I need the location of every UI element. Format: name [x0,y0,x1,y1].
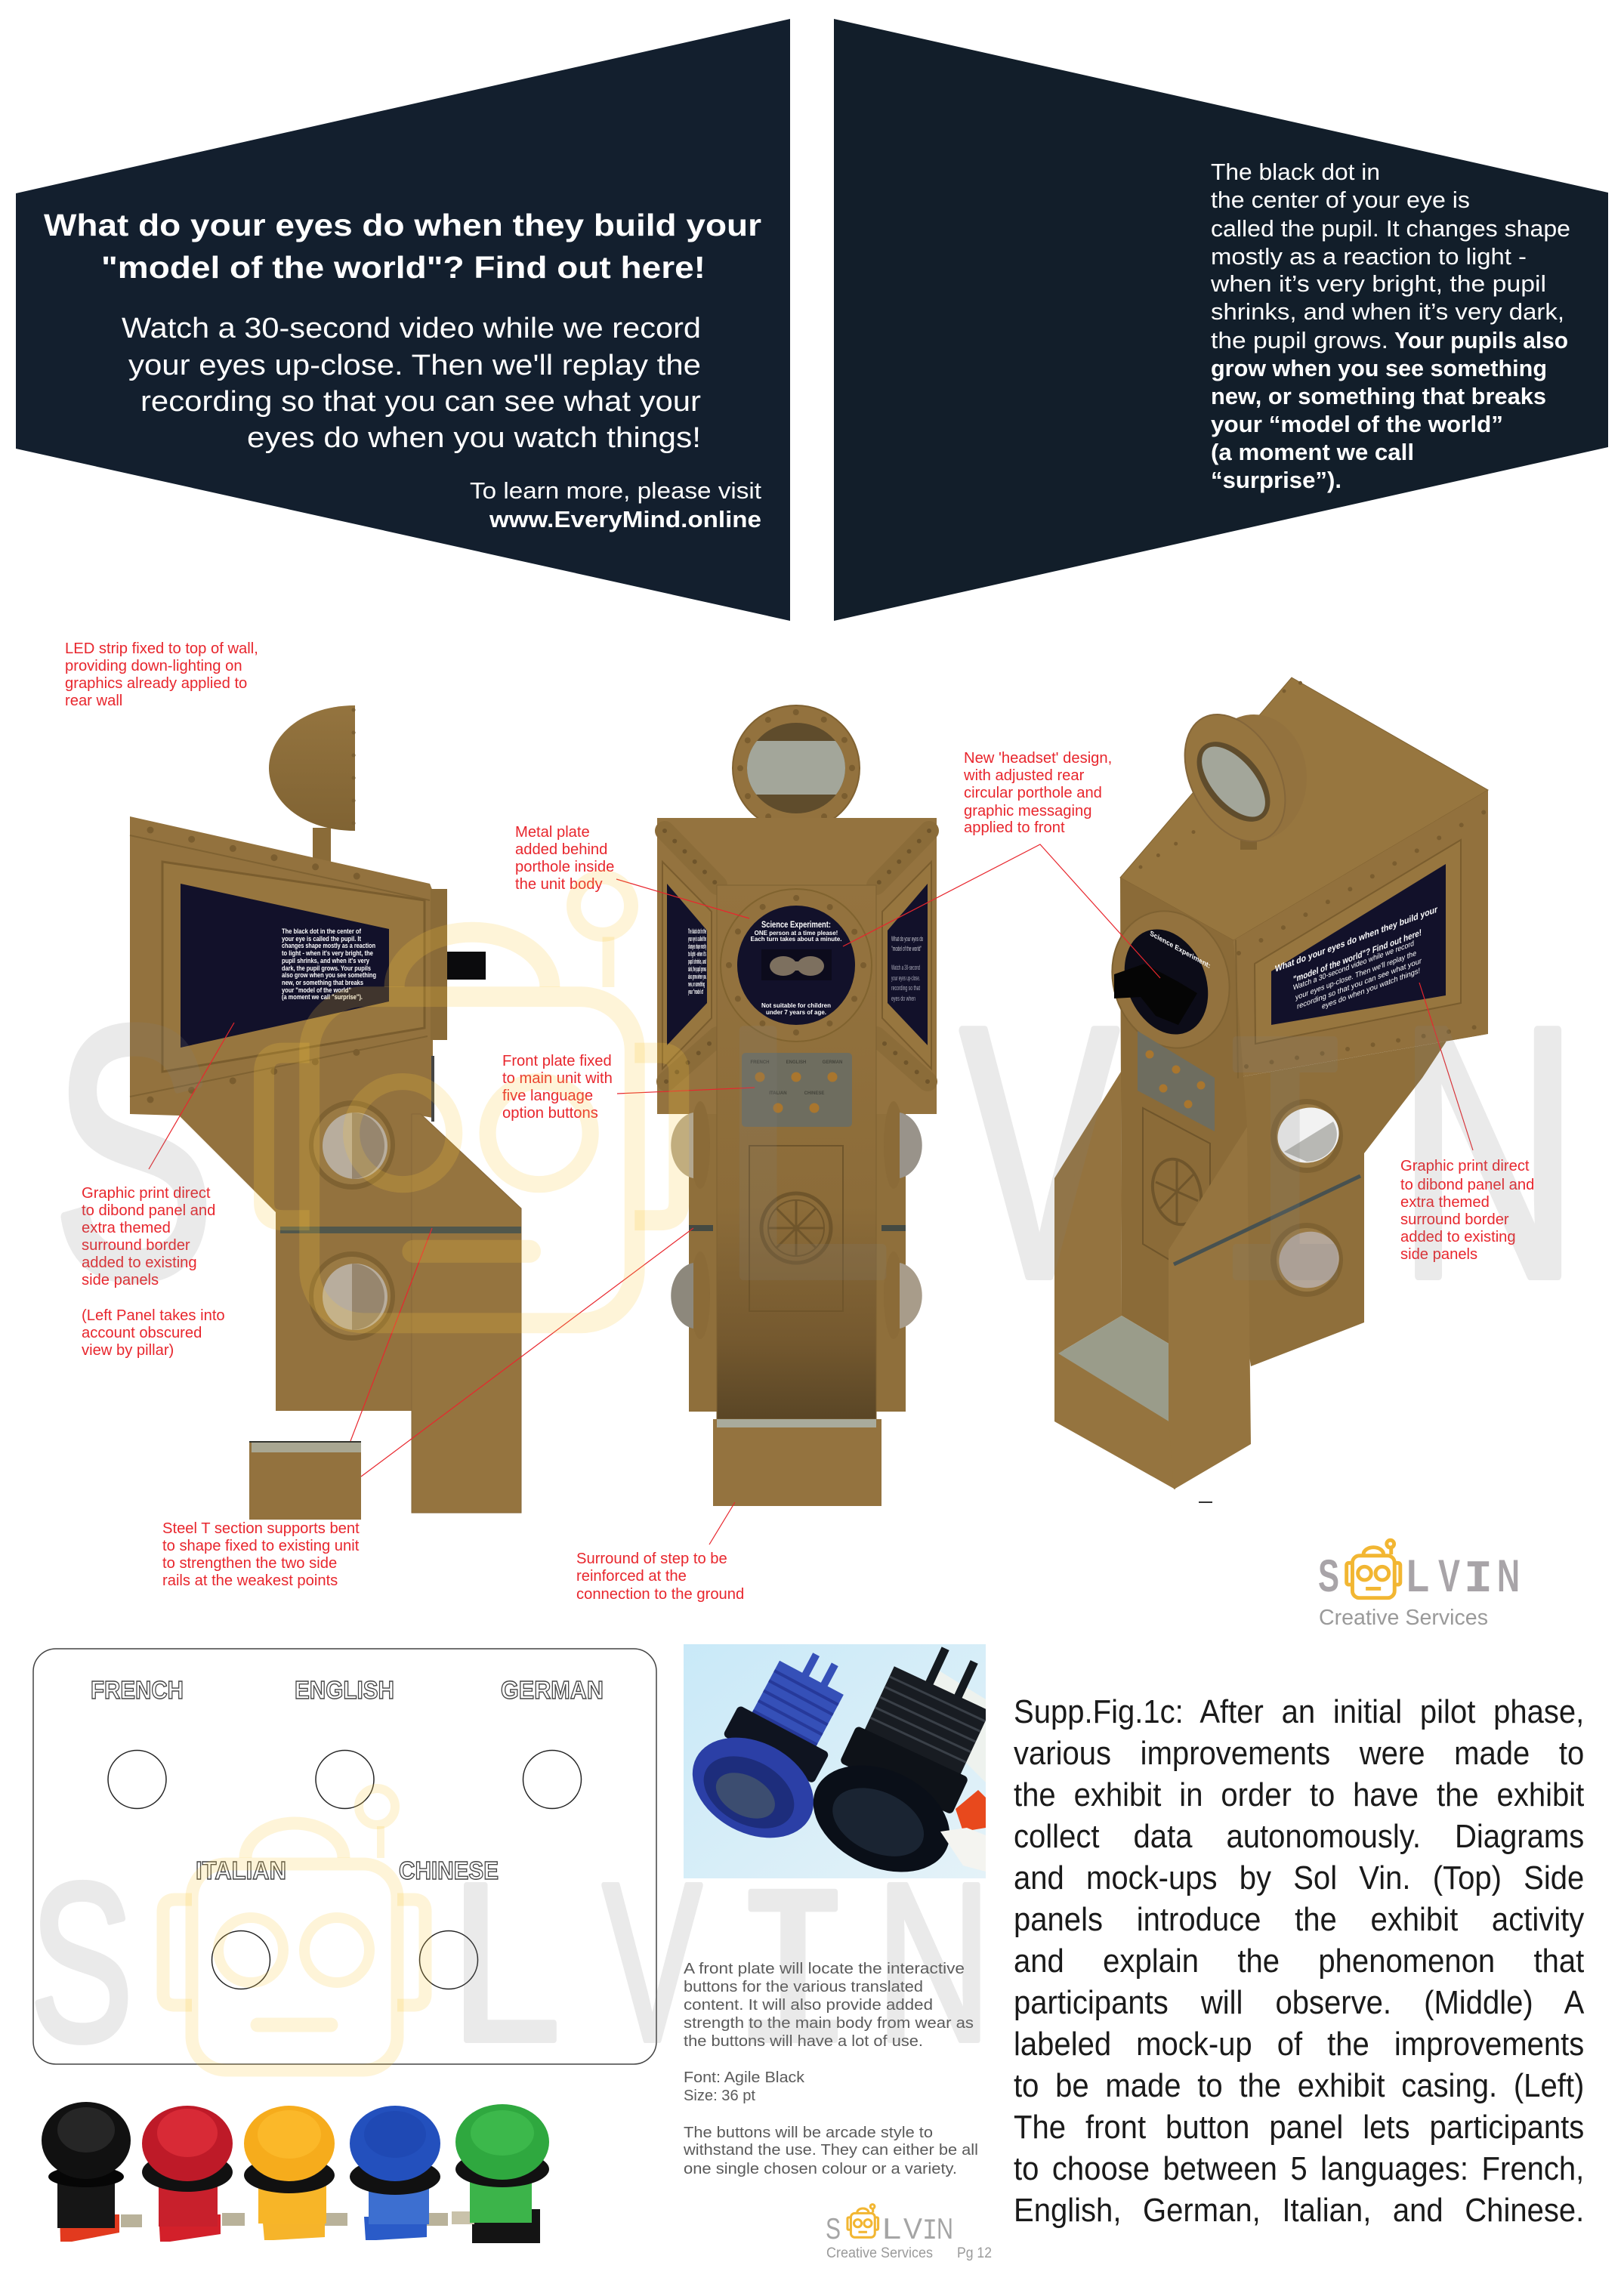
callout: LED strip: rear wall [65,693,122,709]
text block: figure caption: Supp.Fig.1c: After an initial pilot phase, [1014,1693,1584,1730]
mock-up: front view of exhibit: changes shape mostly [688,943,706,950]
watermark: upper Solvin logo: I [1212,979,1359,1383]
front button plate: GERMAN [823,1060,842,1065]
callout: LED strip: providing down-lighting on [65,658,242,674]
text block: pupil explanation: when it’s very bright, the pupil [1210,270,1546,297]
front button plate: ENGLISH [786,1060,806,1065]
callout: step surround [576,1551,744,1603]
logo: small Solvin footer: V [903,2213,922,2245]
graphic screen: pupil shrinks, and when it's very [282,957,370,965]
front step [713,1419,881,1506]
side panel face [1233,790,1488,1078]
text block: website link [470,477,761,532]
pillar [412,1114,521,1513]
watermark: lower Solvin logo [30,1788,991,2108]
right side screen: "model of the world" [891,945,922,952]
central porthole: Science Experiment: [761,919,831,930]
watermark: lower Solvin logo: I [730,1853,856,2108]
text block: front plate notes: strength to the main body from wear as [684,2015,974,2032]
callout: graphic print right [1400,1158,1534,1263]
text block: pupil explanation: your “model of the world” [1211,411,1503,437]
top face [1120,677,1488,940]
front button plate: FRENCH [751,1060,769,1065]
logo: Solvin Creative Services: Creative Services [1319,1606,1488,1630]
text block: figure caption: collect data autonomously. Diagrams [1014,1818,1584,1855]
text block: pupil explanation: shrinks, and when it’s very dark, [1211,298,1564,325]
front porthole: Science Experiment: [1150,929,1211,970]
alcove wall [1054,1072,1122,1359]
watermark: lower Solvin logo: V [603,1837,702,2088]
graphic screen [1271,864,1446,1025]
upper body [657,818,937,1114]
callout: step surround: reinforced at the [576,1568,687,1585]
headset dome [269,705,355,863]
text block: front plate notes: Size: 36 pt [684,2088,755,2104]
logo: small Solvin footer: N [937,2213,953,2245]
text block: figure caption: and explain the phenomenon that [1014,1943,1584,1980]
callout: graphic print left [82,1185,225,1359]
graphic screen: eyes do when you watch things! [1322,967,1420,1011]
switch block [925,1671,986,1782]
side rails [689,1225,906,1231]
callout: graphic print right: surround border [1400,1211,1509,1228]
callout: graphic print left: surround border [82,1237,190,1254]
graphic screen: your eyes up-close. Then we'll replay the [1295,949,1416,1002]
callout: front plate: five language [502,1088,593,1104]
callout: graphic print left: account obscured [82,1325,202,1341]
text block: pupil explanation: called the pupil. It changes shape [1211,215,1570,242]
text block: front plate notes: content. It will also provide added [684,1997,933,2014]
graphic screen: Watch a 30-second video while we record [1293,940,1414,992]
text block: front plate notes: Font: Agile Black [684,2069,805,2086]
heading: panel question: "model of the world"? Find out here! [101,250,705,285]
text block: figure caption: English, German, Italian, and Chinese. [1014,2192,1584,2229]
button plate [1138,1031,1215,1131]
callout: step surround: Surround of step to be [576,1551,727,1567]
mock-up: front view of exhibit: pupil shrinks, and [688,958,706,965]
callout: graphic print left: view by pillar) [82,1342,174,1359]
callout: steel T section: Steel T section supports bent [162,1520,360,1537]
graphic screen [181,884,389,1048]
callout: front plate: to main unit with [502,1070,613,1087]
graphic screen: your "model of the world" [282,986,351,995]
headset plate and camera [431,889,486,1122]
callout: LED strip: graphics already applied to [65,675,247,692]
mock-up: angled view of exhibit [1054,677,1488,1503]
front face [1120,878,1247,1344]
watermark: lower Solvin logo: N [876,1837,991,2088]
graphic screen: recording so that you can see what your [1297,957,1422,1011]
callout: headset [963,750,1112,836]
graphic screen: your eye is called the pupil. It [282,935,362,943]
graphic screen: What do your eyes do when they build your [1275,904,1437,974]
graphic screen: to light - when it's very bright, the [282,949,373,958]
text block: figure caption: labeled mock-up of the improvements [1014,2026,1584,2063]
right side screen [882,862,931,1069]
callout: metal plate: added behind [515,841,607,858]
lower body [689,1110,906,1412]
language labels: GERMAN [501,1676,604,1704]
central porthole: Not suitable for children [761,1002,831,1009]
callout: graphic print left: (Left Panel takes into [82,1307,225,1324]
callout: headset: New 'headset' design, [964,750,1112,767]
language labels: CHINESE [399,1856,499,1884]
callout: graphic print right: Graphic print direct [1400,1158,1530,1174]
button holes [108,1751,582,1989]
upper panel rails and rivets [130,830,430,1100]
right side screen: Watch a 30-second [891,964,920,971]
graphic screen: dark, the pupil grows. Your pupils [282,964,371,973]
logo: small Solvin footer: L [882,2213,901,2245]
graphic screen: (a moment we call "surprise"). [282,993,363,1001]
blue button [350,2106,448,2240]
orange and white buttons [940,1790,986,1872]
panel: pupil explanation side panel [834,19,1608,621]
lower side body [1236,1034,1488,1366]
watermark: upper Solvin logo [53,877,1579,1383]
callout: LED strip [65,640,258,709]
heading: panel question: What do your eyes do when they build your [44,208,761,242]
door panel with wheel [749,1146,843,1311]
text block: front plate notes [683,1961,978,2177]
logo: Solvin Creative Services: L [1406,1551,1429,1601]
black button [42,2102,142,2242]
black button [813,1646,986,1872]
logo: Solvin Creative Services: S [1318,1551,1339,1601]
red button [142,2106,245,2242]
door panel with wheel [1143,1108,1210,1284]
callout: steel T section: rails at the weakest points [162,1572,338,1589]
side portholes [309,1100,395,1341]
callout: steel T section [162,1520,360,1589]
text block: pupil explanation [1210,159,1570,493]
callout: metal plate: porthole inside [515,859,614,875]
central porthole [721,889,872,1042]
steel rail [280,1227,521,1233]
text block: front plate notes: withstand the use. They can either be all [683,2142,978,2159]
right side screen: What do your eyes do [891,935,923,943]
graphic screen: changes shape mostly as a reaction [282,942,375,950]
watermark: lower Solvin logo: S [30,1837,133,2088]
graphic frame [162,862,425,1072]
front button plate [742,1053,852,1127]
cabinet body [130,816,433,1411]
language labels: ENGLISH [295,1676,394,1704]
central porthole: ONE person at a time please! [755,930,838,937]
mock-up: front view of exhibit [657,705,937,1506]
language labels: ITALIAN [196,1856,286,1884]
callout: graphic print right: extra themed [1400,1194,1490,1211]
logo: Solvin Creative Services: I [1464,1554,1493,1606]
callout: headset: graphic messaging [964,803,1091,819]
callout: steel T section: to strengthen the two side [162,1555,337,1572]
watermark: lower Solvin logo: L [450,1837,560,2088]
callout: front plate: Front plate fixed [502,1053,612,1069]
side domes [671,1101,922,1339]
mock-up: front view of exhibit: The black dot in the [688,927,706,935]
diagonal riveted bands [665,831,929,1082]
logo: small Solvin footer: S [826,2213,841,2245]
text block: pupil explanation: mostly as a reaction to light - [1211,243,1527,270]
callout: metal plate [515,824,614,893]
riveted edges [1141,680,1484,1078]
near pillar [1169,1127,1251,1489]
mock-up: side view of exhibit [130,705,521,1520]
panel: intro side panel [16,19,790,621]
side portholes [1270,1099,1346,1297]
logo: Solvin Creative Services: V [1438,1551,1460,1601]
photo: blue and black arcade buttons [684,1644,986,1878]
text block: figure caption: and mock-ups by Sol Vin. (Top) Side [1014,1859,1584,1896]
blue button [692,1653,844,1838]
graphic frame [1255,840,1461,1044]
text block: pupil explanation: the pupil grows. [1211,327,1388,353]
text block: video instructions [122,313,701,454]
centre column [717,885,876,1419]
watermark: upper Solvin logo: V [961,954,1119,1352]
text block: video instructions: recording so that you can see what your [140,386,701,418]
headset ring [732,705,860,818]
logo: small Solvin footer: Creative Services [826,2245,933,2261]
central porthole: under 7 years of age. [766,1009,826,1016]
callout: graphic print right: side panels [1400,1246,1477,1263]
steel rail [1174,1176,1360,1264]
floor mark [1199,1501,1212,1503]
callout: graphic print left: to dibond panel and [82,1202,215,1219]
front button plate: CHINESE [804,1091,824,1096]
text block: pupil explanation: The black dot in [1211,159,1380,185]
panel: language button layout [33,1649,656,2064]
text block: pupil explanation: “surprise”). [1211,467,1341,493]
callout: headset: applied to front [964,819,1065,836]
callout: graphic print left: extra themed [82,1220,171,1236]
mock-up: front view of exhibit: also grow when you [688,973,706,980]
yellow button [244,2106,347,2240]
graphic screen: "model of the world"? Find out here! [1293,927,1422,985]
callout leader lines [149,844,1473,1545]
front porthole [1095,896,1247,1063]
text block: figure caption: The front button panel lets participants [1014,2109,1584,2146]
text block: figure caption: to be made to the exhibit casing. (Left) [1014,2067,1584,2104]
graphic screen: also grow when you see something [282,971,376,980]
text block: front plate notes: the buttons will have a lot of use. [684,2033,923,2050]
headset [1165,697,1307,859]
text block: figure caption: participants will observe. (Middle) A [1014,1984,1584,2021]
photo: five coloured arcade buttons [42,2102,549,2243]
watermark: upper Solvin logo: S [53,954,215,1352]
graphic screen: new, or something that breaks [282,979,363,987]
callout: metal plate: Metal plate [515,824,590,841]
left side screen [662,862,712,1069]
alcove floor [1058,1316,1170,1422]
text block: video instructions: Watch a 30-second video while we record [122,313,701,344]
text block: pupil explanation: Your pupils also [1394,327,1568,353]
text block: front plate notes: one single chosen colour or a variety. [684,2161,957,2177]
mock-up: front view of exhibit: dark, the pupil grows [688,965,706,973]
logo: Solvin Creative Services [1318,1540,1520,1630]
callout: steel T section: to shape fixed to existing unit [162,1538,360,1554]
front button plate: ITALIAN [769,1091,787,1096]
callout: LED strip: LED strip fixed to top of wall, [65,640,258,657]
text block: front plate notes: The buttons will be arcade style to [684,2125,933,2141]
text block: front plate notes: buttons for the various translated [684,1979,923,1995]
text block: figure caption: panels introduce the exhibit activity [1014,1901,1584,1938]
callout: headset: with adjusted rear [963,767,1085,784]
step front [1054,1344,1175,1489]
callout: step surround: connection to the ground [576,1586,744,1603]
text block: figure caption: to choose between 5 languages: French, [1014,2150,1584,2187]
callout: graphic print left: added to existing [82,1255,197,1271]
callout: graphic print left: side panels [82,1272,159,1288]
language labels [91,1676,604,1884]
green button [452,2104,549,2243]
logo: Solvin Creative Services: N [1497,1551,1520,1601]
callout: graphic print right: to dibond panel and [1400,1177,1534,1193]
callout: graphic print left: Graphic print direct [82,1185,211,1202]
callout: headset: circular porthole and [964,785,1102,801]
mock-up: front view of exhibit: your eye is called the [688,935,706,943]
graphic screen: The black dot in the center of [282,927,362,936]
logo: small Solvin footer: I [922,2214,937,2248]
text block: video instructions: your eyes up-close. Then we'll replay the [128,350,701,381]
central porthole: Each turn takes about a minute. [751,936,841,943]
text block: front plate notes: A front plate will locate the interactive [684,1961,965,1977]
callout: front plate [502,1053,613,1122]
text block: pupil explanation: (a moment we call [1211,439,1414,465]
right side screen: recording so that [891,984,920,992]
text block: figure caption: various improvements were made to [1014,1735,1584,1772]
text block: video instructions: eyes do when you watch things! [247,422,701,454]
right side screen: eyes do when [891,995,915,1002]
heading: panel question [44,208,761,285]
text block: website link: www.EveryMind.online [489,506,761,532]
mock-up: front view of exhibit: your "model of [688,988,703,995]
callout: metal plate: the unit body [515,876,604,893]
callout: graphic print right: added to existing [1400,1229,1516,1245]
text block: website link: To learn more, please visit [470,477,761,504]
mock-up: front view of exhibit: to light - when it's [688,950,706,958]
text block: figure caption [1014,1693,1585,2229]
text block: pupil explanation: the center of your eye is [1211,187,1470,213]
language labels: FRENCH [91,1676,184,1704]
mock-up: front view of exhibit: new, or something [688,980,705,988]
right side screen: your eyes up-close. [891,974,920,982]
text block: pupil explanation: grow when you see something [1211,355,1547,381]
text block: figure caption: the exhibit in order to have the exhibit [1014,1776,1584,1813]
step block [249,1441,361,1520]
watermark: upper Solvin logo: L [718,954,893,1352]
logo: small Solvin footer [826,2205,953,2261]
callout: front plate: option buttons [502,1105,598,1122]
text block: pupil explanation: new, or something that breaks [1211,383,1546,409]
page number: Pg 12 [957,2245,992,2261]
